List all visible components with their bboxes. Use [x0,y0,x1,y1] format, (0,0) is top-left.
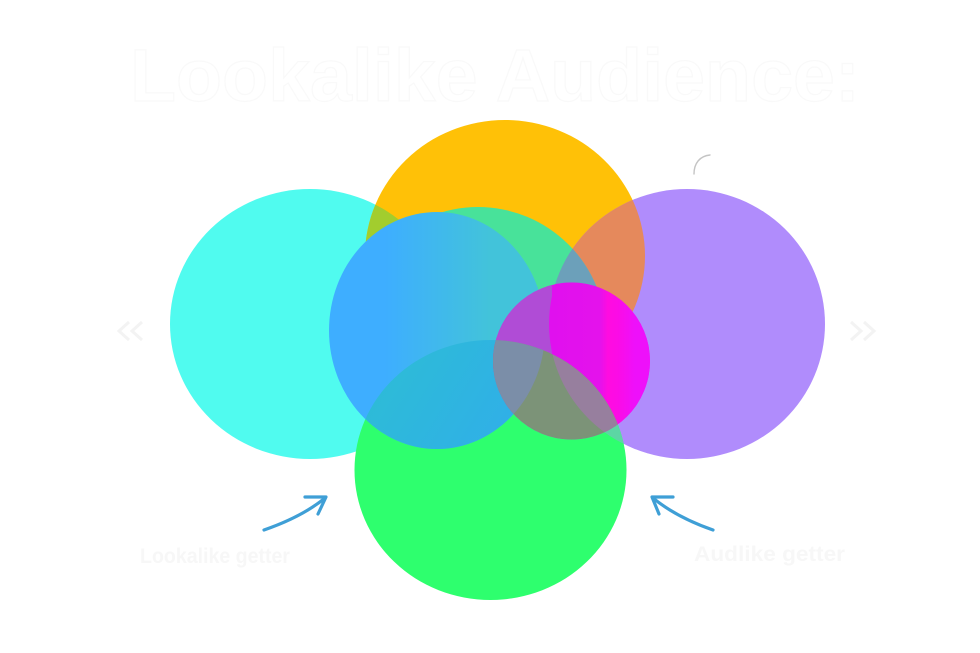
overlap: blue and bright green [366,340,514,449]
overlap: magenta and left violet segment [493,282,650,432]
circle: bright green [354,340,626,600]
circle: purple [549,189,825,459]
overlap: bright green and purple [604,424,624,444]
icon: right double chevron [851,322,874,340]
overlap: teal and purple [555,248,596,286]
overlap: cyan and yellow [366,204,399,242]
overlap: yellow and purple [572,200,645,312]
icon: small grey arc [694,155,710,174]
venn diagram [170,120,825,600]
circle: teal green [350,207,606,463]
arrow: right [652,497,713,530]
circle: magenta [493,282,650,440]
circle: cyan [170,189,450,459]
overlap: magenta, bright green and purple [552,354,618,432]
overlap: magenta, bright green and blue [493,340,544,414]
label: left: Lookalike getter [140,545,290,568]
label: right: Audlike getter [694,543,845,566]
title: Lookalike Audience: [130,34,860,117]
overlap: magenta and bright green [493,340,618,440]
arrow: left [264,497,326,530]
icon: left double chevron [119,322,142,340]
circle: yellow [365,120,645,392]
circle: blue [329,212,545,449]
